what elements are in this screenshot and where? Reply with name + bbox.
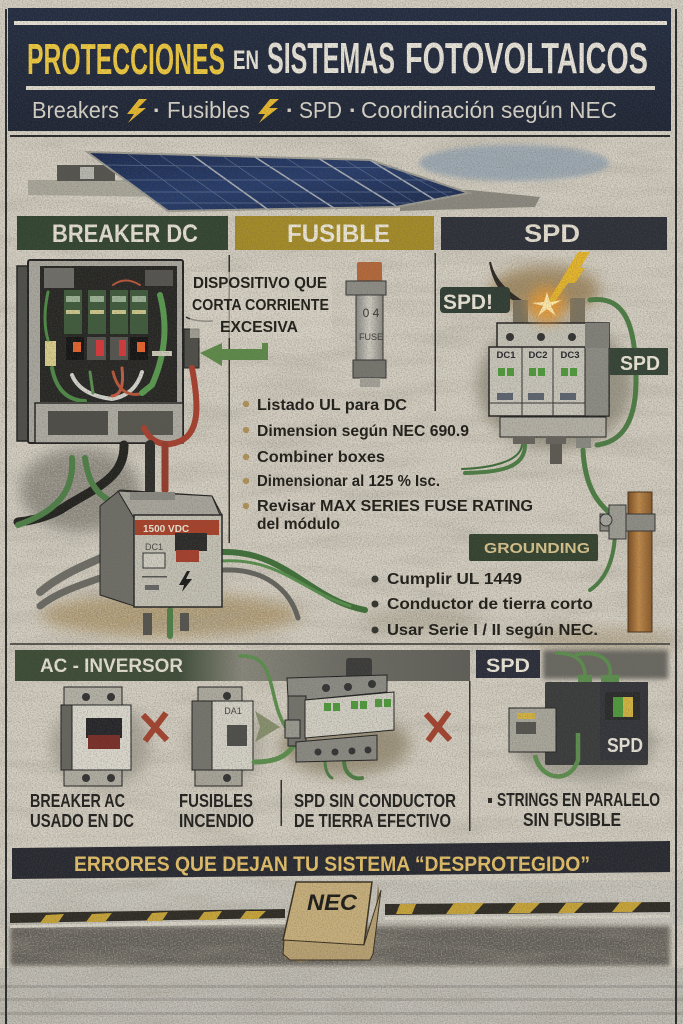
illustration: SPD device with strike: DC1 [496,350,516,361]
illustration: combiner with SPD [509,653,655,780]
device body [497,323,609,348]
header: AC - inversor [15,650,470,681]
internal wires [45,280,164,401]
labels: error captions: USADO EN DC [30,811,134,831]
subtitle: Fusibles [167,97,250,123]
labels: error captions: BREAKER AC [30,791,125,811]
labels: error captions: FUSIBLES [179,791,253,811]
illustration: SPD device with strike [462,252,636,590]
arrow: green pointer [200,343,268,366]
column headers [17,216,667,250]
header: SPD lower [476,650,668,679]
illustration: DC disconnect box: 1500 VDC [143,524,189,535]
icon: lightning bolt [258,99,279,123]
header: AC - inversor: AC - INVERSOR [40,656,183,677]
illustration: SPD device with strike: DC3 [560,350,580,361]
callout: device description: EXCESIVA [220,319,298,336]
ground and wires [462,299,636,590]
list: SPD bullets: Usar Serie I / II según NEC. [387,622,598,639]
illustration: solar panels on roof [28,145,609,211]
callout: device description: DISPOSITIVO QUE [193,275,327,292]
title [27,34,648,84]
bottom plate [35,403,183,443]
list: fuse bullets: del módulo [257,516,340,533]
label: SPD!: SPD! [443,291,493,314]
label: grounding: GROUNDING [484,540,590,557]
terminals [513,300,528,324]
callout: device description: CORTA CORRIENTE [192,297,329,314]
list: fuse bullets: Revisar MAX SERIES FUSE RATING [257,498,533,515]
subtitle: · [286,97,294,123]
labels: error captions: SIN FUSIBLE [523,810,621,830]
subtitle: · [349,97,357,123]
terminal block [184,329,199,368]
icon: lightning bolt [127,99,147,123]
icon: red X [143,713,167,741]
lower section dividers [280,681,470,831]
illustration: grounding rod [600,492,655,632]
divider under header [10,132,670,137]
label: SPD [610,348,668,375]
subtitle: Breakers [32,97,119,123]
banner: errors: ERRORES QUE DEJAN TU SISTEMA “DESPROTEGIDO” [74,853,590,876]
spark and lightning [529,287,565,323]
title: SISTEMAS [267,34,395,83]
labels: error captions: INCENDIO [179,811,254,831]
header: SPD lower: SPD [486,656,530,677]
illustration: DC disconnect box [100,490,222,635]
illustration: DC disconnect box: DC1 [145,542,163,552]
icon: fuse [346,262,386,387]
illustration: AC breaker [50,687,150,787]
hazard strip [10,902,670,928]
label: SPD: SPD [620,353,660,375]
icon: red X [426,712,450,741]
subtitle: Coordinación según NEC [361,97,617,123]
banner: errors [12,841,670,879]
illustration: fuse holder: DA1 [224,706,242,716]
icon: fuse: 0 4 [363,306,380,320]
illustration: cables [18,368,365,636]
icon: NEC code book [283,882,381,962]
subtitle: SPD [299,97,342,123]
breakers [64,290,148,360]
column dividers [228,253,436,543]
title: EN [233,45,259,75]
icon: NEC code book: NEC [307,890,358,915]
label: SPD! [440,287,510,314]
list: fuse bullets: Dimensionar al 125 % Isc. [257,473,440,490]
subtitle: · [153,97,161,123]
header banner [8,8,671,131]
icon: fuse: FUSE [359,332,383,342]
title: PROTECCIONES [27,35,225,84]
subtitle [32,97,617,123]
arrow: pointer to SPD [255,711,280,742]
list: SPD bullets: Cumplir UL 1449 [387,571,522,588]
labels: error captions [30,790,660,831]
illustration: combiner with SPD: SPD [607,735,643,757]
list: SPD bullets: Conductor de tierra corto [387,596,593,613]
header: Breaker DC [17,216,228,250]
horn [490,262,523,302]
list: fuse bullets [243,397,533,533]
illustration: fuse holder [185,687,265,786]
list: fuse bullets: Dimension según NEC 690.9 [257,423,469,440]
header: Fusible: FUSIBLE [287,220,390,248]
labels: error captions: DE TIERRA EFECTIVO [294,811,451,831]
icon: bolt [179,571,192,592]
list: SPD bullets [372,571,598,639]
list: fuse bullets: Combiner boxes [257,449,385,466]
header: SPD [441,217,667,250]
label tag [45,341,56,366]
header: SPD: SPD [524,220,580,248]
header: Fusible [235,216,434,250]
callout tick [186,317,213,321]
section divider [10,643,670,645]
labels: error captions: SPD SIN CONDUCTOR [294,791,456,811]
illustration: SPD device with strike: DC2 [528,350,548,361]
label: grounding [469,534,598,561]
header: Breaker DC: BREAKER DC [52,220,198,248]
illustration: SPD without ground [240,656,410,778]
callout: device description [190,272,332,338]
illustration: DC combiner box [17,260,213,443]
list: fuse bullets: Listado UL para DC [257,397,407,414]
